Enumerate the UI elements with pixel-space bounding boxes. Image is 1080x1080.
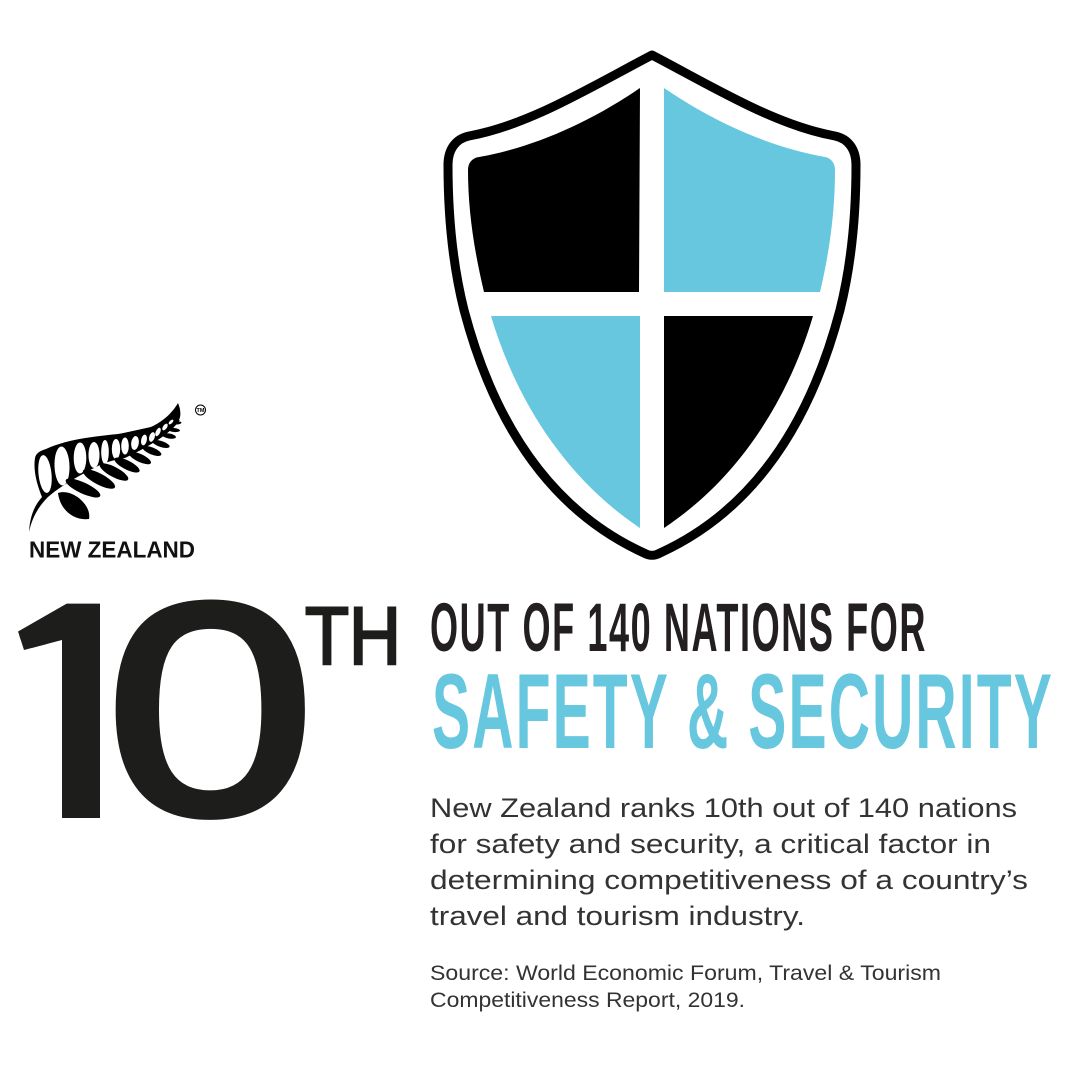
body text: determining competitiveness of a country’s	[430, 865, 1028, 895]
icon: shield	[448, 55, 856, 555]
source note: Source: World Economic Forum, Travel & Tourism	[430, 962, 941, 985]
body text: for safety and security, a critical factor in	[430, 829, 991, 859]
ordinal suffix: TH	[305, 591, 401, 682]
big rank number: 0	[106, 542, 315, 877]
heading	[430, 589, 1054, 771]
icon: silver fern	[29, 403, 182, 532]
body text	[430, 793, 1028, 931]
source note: Competitiveness Report, 2019.	[430, 989, 745, 1012]
body text: travel and tourism industry.	[430, 901, 805, 931]
icon: trademark: TM	[197, 408, 205, 414]
icon: trademark	[196, 405, 206, 415]
logo: New Zealand fern	[29, 403, 206, 562]
big rank number	[18, 600, 396, 820]
logo wordmark: NEW ZEALAND	[29, 536, 195, 562]
source note	[430, 962, 941, 1012]
body text: New Zealand ranks 10th out of 140 nations	[430, 793, 1017, 823]
